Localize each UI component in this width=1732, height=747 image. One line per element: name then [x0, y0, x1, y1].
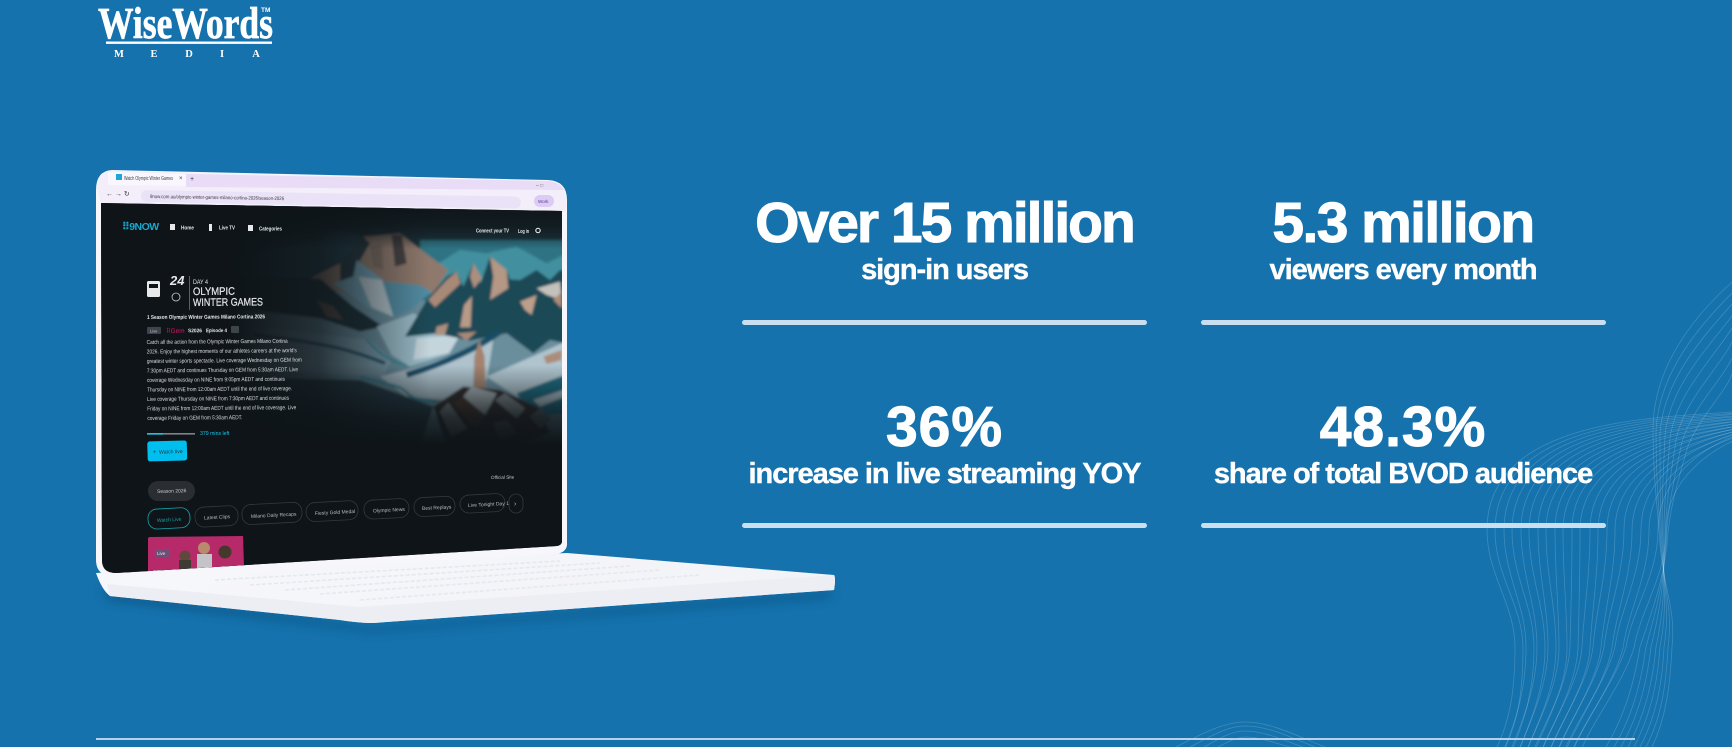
stat: 5.3 million viewers every month — [1269, 191, 1536, 286]
browser chrome: + — [190, 176, 194, 183]
programme tags — [147, 326, 239, 334]
category chips: Live Tonight Day 1 — [468, 501, 509, 509]
stat: 36% increase in live streaming YOY: increase in live streaming YOY — [749, 458, 1140, 490]
hero illustration: alpine mountains and village — [230, 205, 562, 436]
divider under sign-in users — [742, 320, 1147, 324]
programme tags: S2026 — [188, 328, 202, 334]
progress bar: 379 mins left — [200, 431, 230, 437]
progress bar — [147, 431, 230, 435]
Olympic title lockup: 24 — [169, 273, 185, 288]
logo: WiseWords Media: M — [114, 49, 124, 60]
village — [433, 386, 548, 435]
season selector: Season 2026 — [157, 488, 187, 495]
category chips: Olympic News — [373, 507, 406, 514]
programme tags: Live — [150, 328, 158, 333]
divider under live streaming — [742, 523, 1147, 528]
pink episode card: DAY 4 — [153, 570, 168, 576]
programme tags: Episode 4 — [206, 328, 227, 334]
browser page content — [95, 200, 573, 584]
logo: WiseWords Media: TM — [261, 7, 270, 14]
browser chrome: Work — [538, 199, 549, 204]
bell tower — [473, 340, 486, 388]
programme description: 2026. Enjoy the highest moments of our athletes careers at the world's — [147, 348, 297, 356]
category chips: Milano Daily Recaps — [251, 512, 297, 520]
right massif — [405, 257, 573, 353]
laptop base and keyboard deck — [96, 553, 835, 623]
programme description: Catch all the action from the Olympic Winter Games Milano Cortina — [147, 339, 288, 346]
footer rule — [96, 738, 1635, 740]
pink episode card — [148, 536, 244, 572]
Olympic title lockup: OLYMPIC — [193, 286, 235, 298]
category chips: › — [514, 501, 517, 508]
programme description: Friday on NINE from 12:00am AEDT until the end of live coverage. Live — [147, 405, 296, 412]
9Now nav bar: ⠿9NOW — [122, 221, 159, 233]
page text and controls: 1 Season Olympic Winter Games Milano Cortina 2026 — [147, 314, 265, 321]
page text and controls — [122, 221, 540, 576]
stat: 5.3 million viewers every month: 5.3 million — [1272, 191, 1534, 255]
browser chrome: – □ — [536, 183, 543, 189]
programme description — [147, 339, 303, 422]
divider under viewers every month — [1200, 320, 1606, 324]
browser chrome: × — [179, 176, 183, 182]
9Now nav bar — [123, 222, 541, 234]
laptop shadow — [100, 590, 834, 632]
browser chrome: ← → ↻ — [106, 191, 130, 198]
programme description: Live coverage Thursday on NINE from 7:30pm AEDT and continues — [147, 396, 289, 403]
logo: WiseWords Media: A — [252, 49, 260, 60]
laptop mockup showing the 9Now Olympic Winter Games page — [96, 170, 835, 634]
season selector — [148, 481, 195, 501]
9Now nav bar: Home — [181, 226, 194, 232]
programme description: coverage Wednesday on NINE from 9:05pm AEDT and continues — [147, 377, 285, 384]
category chips — [148, 493, 523, 529]
logo: WiseWords Media: D — [185, 49, 193, 60]
official site link: Official Site — [491, 475, 515, 480]
programme tags: ⠿Gem — [166, 328, 185, 335]
stat: 36% increase in live streaming YOY — [749, 395, 1142, 490]
9Now nav bar: Live TV — [219, 226, 235, 232]
watch live button: + — [153, 450, 157, 456]
9Now nav bar: Log in — [518, 229, 529, 235]
programme description: 7:30pm AEDT and continues Thursday on GEM from 5:30am AEDT. Live — [147, 367, 298, 375]
category chips: Latest Clips — [204, 514, 231, 521]
programme description: Thursday on NINE from 12:00am AEDT until the end of live coverage. — [147, 386, 292, 393]
stat: 48.3% share of total BVOD audience — [1214, 395, 1592, 490]
stat: over 15 million sign-in users: Over 15 million — [755, 191, 1134, 255]
Olympic title lockup: DAY 4 — [193, 280, 209, 286]
laptop lid frame — [96, 170, 567, 578]
stat: 48.3% share of total BVOD audience: share of total BVOD audience — [1214, 458, 1592, 490]
tree bands and river — [407, 332, 500, 375]
snowfield — [377, 313, 460, 367]
category chips: Fiesty Gold Medal — [315, 509, 355, 517]
9Now nav bar: Categories — [259, 226, 282, 232]
stat: 5.3 million viewers every month: viewers every month — [1270, 254, 1536, 286]
9Now nav bar: Connect your TV — [476, 228, 509, 234]
Olympic title lockup: WINTER GAMES — [193, 296, 263, 309]
scrollbar — [562, 214, 565, 244]
logo: WiseWords Media: E — [150, 49, 158, 60]
stat: over 15 million sign-in users — [755, 191, 1134, 286]
pink episode card: Live — [157, 551, 166, 556]
Olympic title lockup — [147, 273, 263, 310]
stat: 36% increase in live streaming YOY: 36% — [886, 395, 1003, 459]
stat: over 15 million sign-in users: sign-in users — [861, 254, 1028, 286]
divider under BVOD audience — [1200, 523, 1606, 528]
browser chrome: Watch Olympic Winter Games — [124, 176, 173, 182]
watch live button — [147, 440, 187, 461]
logo: WiseWords Media: I — [220, 49, 224, 60]
programme description: greatest winter sports spectacle. Live coverage Wednesday on GEM from — [147, 358, 302, 365]
programme description: coverage Friday on GEM from 5:30am AEDT. — [147, 415, 243, 422]
browser chrome: 9now.com.au/olympic-winter-games-milano-cortina-2026/season-2026 — [150, 194, 284, 202]
browser chrome — [97, 171, 566, 212]
stat: 48.3% share of total BVOD audience: 48.3% — [1320, 395, 1486, 459]
category chips: Watch Live — [157, 517, 182, 524]
watch live button: Watch live — [159, 449, 183, 456]
category chips: Best Replays — [422, 504, 452, 512]
central peak — [312, 232, 450, 296]
